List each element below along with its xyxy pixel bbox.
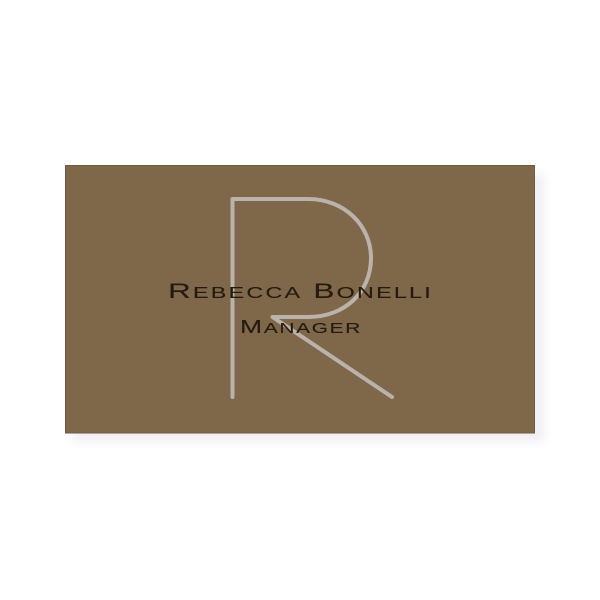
monogram letter R [232, 199, 392, 397]
panel: business card [66, 166, 534, 433]
card shadow [72, 174, 544, 442]
job title: M ANAGER [240, 316, 362, 337]
name: R EBECCA B ONELLI [168, 280, 433, 303]
